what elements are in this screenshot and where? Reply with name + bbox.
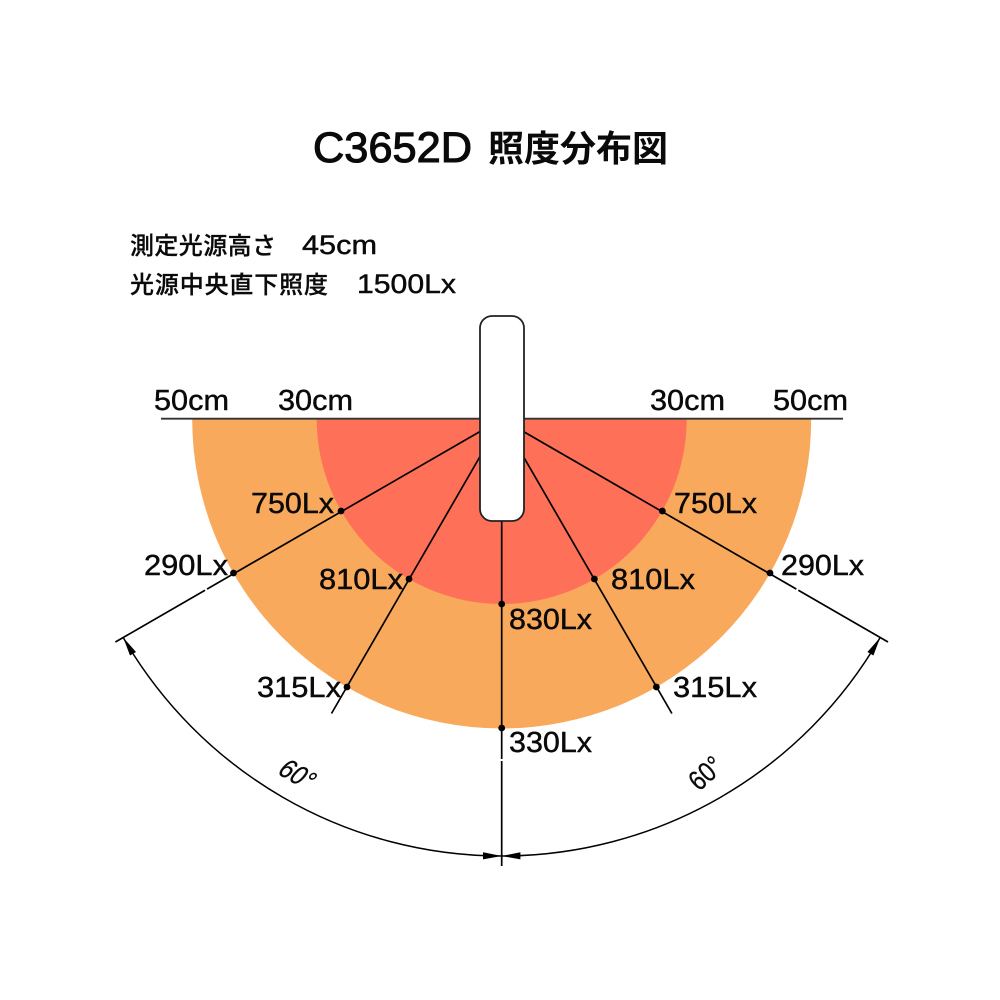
lux labels: 315Lx (257, 672, 342, 704)
distance labels: 50cm (154, 385, 229, 417)
lux labels: 830Lx (509, 604, 593, 636)
distance labels: 30cm (650, 385, 725, 417)
lux labels: 290Lx (144, 550, 229, 582)
distance labels: 30cm (278, 385, 353, 417)
angle label right: 60° (682, 750, 729, 796)
title: C3652D (313, 124, 472, 172)
distance labels (154, 385, 848, 417)
lux labels: 810Lx (611, 564, 696, 596)
angle label left: 60° (272, 753, 324, 795)
angle arc: left 60 degrees (123, 638, 502, 859)
lux labels: 750Lx (251, 488, 335, 520)
baseline rule (161, 418, 843, 420)
text block: measurement conditions (130, 230, 457, 299)
inner zone: 30cm (317, 419, 687, 604)
lamp head (480, 316, 524, 521)
lux labels: 750Lx (674, 488, 758, 520)
title (313, 124, 668, 172)
distance labels: 50cm (773, 385, 848, 417)
text block: measurement conditions: 1500Lx (357, 269, 457, 299)
text block: measurement conditions: 45cm (302, 230, 377, 260)
measurement rays (115, 419, 888, 866)
lux labels: 315Lx (673, 672, 758, 704)
angle arc: right 60 degrees (502, 638, 880, 859)
text block: measurement conditions: 測定光源高さ (130, 233, 276, 260)
lux labels: 290Lx (781, 550, 865, 582)
text block: measurement conditions: 光源中央直下照度 (130, 272, 328, 299)
chart: illuminance distribution (115, 316, 888, 866)
ray gaps (205, 589, 798, 761)
title: 照度分布図 (488, 128, 668, 169)
lux labels: 810Lx (319, 564, 404, 596)
measurement dots (230, 508, 773, 731)
lux labels: 330Lx (509, 727, 593, 759)
lux labels (144, 488, 865, 759)
outer zone: 50cm (192, 419, 811, 728)
